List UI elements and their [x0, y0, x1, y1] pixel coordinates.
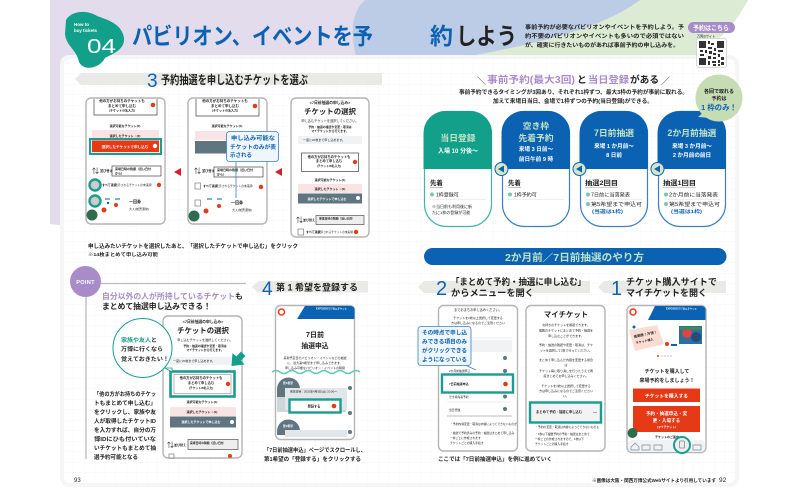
- callout: clickable items: [418, 326, 476, 370]
- phone screen G: チケット毎に取り消しを行ったうえで再: [539, 368, 593, 373]
- phone screen B: ⇅: [194, 167, 201, 175]
- card: same-day registration: 先着: [430, 178, 443, 187]
- phone screen C: 他の方がお持ちのチケットも: [308, 154, 350, 159]
- section bar: [424, 248, 726, 265]
- heading: pre-reservation and same-day: 事前予約(最大3回): [487, 73, 575, 86]
- card: same-day registration: たに1枠の登録が可能: [432, 209, 470, 215]
- phone screen G: ・予約の変更・取消は内容によってできないものも: [535, 425, 599, 429]
- step 04 badge: [65, 12, 124, 68]
- header background shapes: [50, 0, 748, 227]
- callout: only eligible tickets: 申し込み可能な: [231, 134, 275, 142]
- card: 2 months lottery: 2か月前抽選: [668, 127, 717, 138]
- phone screen B: 大人(前売通常): [232, 207, 252, 212]
- card: 2 months lottery: (当選は1枠): [671, 208, 702, 215]
- phone screen A: 並び替え: [100, 168, 113, 173]
- phone screen D: 選択したチケットで申し込む: [181, 419, 221, 424]
- heading description: 加えて来場日当日、会場で1枠ずつの予約(当日登録)ができる。: [493, 97, 653, 105]
- card: 7 days lottery: 8 日前: [606, 151, 622, 159]
- phone screen C: 来場日時の降順（近い日付: [319, 216, 353, 220]
- heading: step 2: [418, 276, 590, 300]
- phone screen E: 抽選申込: [301, 341, 329, 350]
- card: 7 days lottery: 抽選2回目: [585, 178, 618, 187]
- card: same-day registration: [423, 111, 492, 226]
- phone screen B: 選択可能なチケット(0): [212, 123, 242, 128]
- phone screen G: い。: [563, 394, 569, 398]
- card: first-come: 前日午前 9 時: [519, 155, 553, 163]
- phone screen D: 一度に20枚まで申し込めます。: [173, 358, 215, 363]
- speech circle: 覚えておきたい！: [121, 355, 169, 363]
- phone screen B: 来場日時の降順（近い日付: [217, 167, 253, 172]
- speech circle: 家族や: [121, 336, 139, 344]
- phone screen H: 来場予約をしましょう！: [639, 377, 695, 384]
- phone screen H: EXPO2025デジタルチケット: [666, 306, 698, 310]
- arrow: [275, 168, 282, 176]
- heading: pre-reservation and same-day: と: [577, 74, 587, 86]
- phone screen G: ・1枚以下複数予約の予約・抽選はまとめて: [535, 432, 590, 436]
- heading: step 1: [598, 276, 726, 300]
- card: 2 months lottery: 来場 3 か月前～: [672, 142, 712, 150]
- phone screen B: から）: [217, 172, 226, 176]
- point section: も: [235, 292, 243, 301]
- card: first-come: 先着予約: [518, 132, 554, 143]
- phone screen D: 並び替え: [174, 442, 186, 447]
- phone screen F: ・予約内容変更・取消は内容によってできないものが: [450, 422, 517, 426]
- phone screen D: (チケットID名入力): [189, 386, 213, 390]
- caption: step 3: 申し込みたいチケットを選択したあと、「選択したチケットで申し込む」をクリック: [88, 242, 298, 250]
- phone screen E: 来場日時：2025年4月5日(土) 20:00～: [290, 390, 337, 394]
- phone screen A: 来場日時の降順（近い日付: [115, 166, 151, 171]
- phone screen D: ⇅: [167, 441, 174, 449]
- phone screen D: 予約・抽選の確認や変更・取消は: [183, 343, 227, 348]
- phone screen C: すべて選択: [306, 229, 321, 234]
- phone screen D: 他の方がお持ちのチケットも: [180, 375, 222, 380]
- heading: step 4: 第 1 希望を登録する: [276, 282, 358, 292]
- phone screen A: から）: [115, 170, 124, 176]
- phone screen G: 度まとめてお申し込みください。: [544, 373, 588, 378]
- phone screen F: 2か月前抽選申込: [449, 369, 470, 373]
- phone screen E: [272, 306, 360, 440]
- phone screen D: 選択可能なチケット(0): [187, 399, 217, 404]
- phone screen D: 申し込むチケットを選択してください。: [177, 337, 233, 342]
- point section: POINT: [76, 280, 95, 286]
- heading: step 3: 3: [147, 71, 158, 92]
- phone screen E: 第1希望: [283, 381, 293, 385]
- step 04 badge: How to: [74, 22, 89, 27]
- card: 7 days lottery: 来場 1 か月前～: [594, 142, 634, 150]
- card: first-come: 先着: [508, 178, 521, 187]
- phone screen B: 並び替え: [202, 168, 215, 173]
- phone screen E: に、最大第5希望まで申し込みできます。: [287, 360, 343, 365]
- phone screen C: まとめて申し込む: [316, 158, 343, 163]
- phone screen B: [188, 98, 267, 224]
- callout: clickable items: ようになっている: [422, 356, 467, 364]
- phone screen A: 他の方がお持ちのチケットも: [99, 98, 145, 103]
- phone screen D: まとめて申し込む: [188, 380, 215, 385]
- footer note and page number: 92: [719, 477, 727, 484]
- page number 93: 93: [74, 478, 81, 484]
- card: 7 days lottery: 7日前抽選: [594, 127, 634, 138]
- phone screen D: チケットの選択: [177, 326, 229, 335]
- phone screen F: 当日登録: [449, 408, 460, 412]
- card: 2 months lottery: [657, 111, 726, 226]
- phone screen G: まとめて予約・抽選に申し込む: [536, 409, 583, 414]
- intro text: 事前予約が必要なパビリオンやイベントを予約しよう。予: [525, 23, 684, 31]
- phone screen H: チケットを購入して: [645, 368, 689, 375]
- callout: only eligible tickets: チケットのみが表: [230, 143, 276, 151]
- phone screen E: EXPO2025デジタルチケット: [316, 306, 348, 310]
- point body text: を入力すれば、自分の万: [94, 426, 156, 434]
- phone screen C: 並び替え: [303, 217, 315, 222]
- phone screen G: は: [564, 362, 568, 367]
- phone screen G: 申し込むことができます。: [548, 333, 584, 338]
- phone screen B: すべて選択: [203, 183, 218, 188]
- callout: clickable items: がクリックできる: [422, 346, 467, 354]
- heading: pre-reservation and same-day: 当日登録: [588, 73, 629, 86]
- phone screen A: 選択可能なチケット(0): [110, 123, 140, 128]
- heading: step 2: 「まとめて予約・抽選に申し込む」: [451, 276, 586, 287]
- card: first-come: 来場 3 日前～: [519, 145, 553, 153]
- phone screen G: 方は申し込みになるのでご注意ください: [539, 388, 593, 393]
- callout: only eligible tickets: 示される: [230, 152, 252, 159]
- phone screen F: チケットを2枚以上選択して変更する: [453, 315, 503, 320]
- card: 2 months lottery: 第5希望まで申込可: [669, 201, 720, 208]
- heading: pre-reservation and same-day: [477, 73, 670, 86]
- phone screen E: 来場予定日のパビリオン・イベントなどの抽選: [283, 355, 347, 360]
- phone screen E: 申し込み可能なパビリオン・イベントの時間: [285, 365, 345, 370]
- bubble: one slot each: 予約は: [711, 95, 727, 102]
- heading: pre-reservation and same-day: ／: [661, 76, 670, 86]
- heading: step 3: [75, 71, 382, 92]
- phone screen D: マイチケットから行えます。: [186, 347, 224, 352]
- speech circle: 万博に行くなら: [121, 345, 163, 353]
- point section: まとめて抽選申し込みできる！: [102, 301, 211, 311]
- step 04 badge: 04: [87, 36, 116, 58]
- heading: step 2: 2: [436, 278, 447, 300]
- phone screen C: [291, 98, 369, 237]
- phone screen E: 登録する: [308, 404, 320, 408]
- phone screen H: チケットを購入する: [645, 392, 688, 400]
- heading: step 1: 1: [611, 278, 622, 300]
- phone screen A: まとめて申し込む: [108, 103, 136, 108]
- intro text: が、確実に行きたいものがあれば事前予約の申し込みを。: [525, 41, 679, 49]
- card: 7 days lottery: 第5希望まで申込可: [591, 201, 642, 208]
- heading: step 3: 予約抽選を申し込むチケットを選ぶ: [161, 72, 308, 87]
- point body text: [94, 390, 156, 461]
- card: 2 months lottery: 2 か月前の前日: [673, 151, 711, 159]
- phone screen C: チケットの選択: [304, 107, 356, 116]
- caption: step 4: [264, 446, 366, 463]
- phone screen C: 申し込むチケットを選択してください。: [301, 118, 359, 123]
- phone screen C: ⇅: [296, 216, 303, 224]
- point body text: 人が取得したチケットID: [94, 417, 156, 425]
- phone screen G: [526, 306, 605, 451]
- phone screen F: までおまちお申し込みください。: [454, 307, 502, 312]
- phone screen D: <7日前抽選の申し込み>: [183, 319, 224, 324]
- speech circle: [113, 318, 172, 378]
- point body text: 博IDにひも付いていな: [94, 435, 156, 443]
- phone screen A: 選択したチケット：(0): [110, 133, 140, 138]
- heading: step 4: 4: [262, 279, 273, 300]
- card: 7 days lottery: [579, 111, 648, 226]
- phone screen C: マイチケットから行えます。: [311, 128, 349, 133]
- phone screen E: 7日前: [306, 330, 324, 339]
- QR link badge: [688, 22, 735, 68]
- intro text: 約不要のパビリオンやイベントも多いので必須ではない: [525, 32, 684, 40]
- phone screen F: [438, 306, 518, 451]
- phone screen H: 予約・抽選申込・変: [646, 410, 688, 417]
- phone screen B: まとめて申し込む: [211, 103, 239, 108]
- caption: step 4: 第1希望の「登録する」をクリックする: [264, 455, 361, 463]
- point section: [70, 266, 246, 459]
- phone screen B: 表示されるチケットの未来順: [216, 184, 253, 188]
- phone screen G: 複数のチケットにまとめて予約・抽選を: [539, 328, 593, 332]
- phone screen H: (マイチケット): [657, 425, 676, 429]
- phone screen A: 表示されるチケットの未来順: [115, 183, 152, 187]
- phone screen C: 予約・抽選の確認や変更・取消は: [308, 124, 352, 129]
- title: 約: [430, 23, 453, 49]
- title: パビリオン、イベントを予: [132, 23, 373, 49]
- phone screen G: マイチケット: [544, 310, 588, 319]
- phone screen F: 空き枠先着予約: [449, 395, 469, 399]
- point body text: 「他の方がお持ちのチケッ: [94, 390, 156, 398]
- phone screen G: ットを選択して2枚で行ってください。: [540, 348, 592, 352]
- phone screen F: チケットごとの購入手続き: [450, 441, 484, 445]
- heading: pre-reservation and same-day: がある: [630, 73, 659, 86]
- caption: step 4: 「7日前抽選申込」ページでスクロールし、: [264, 446, 366, 454]
- phone screen B: 他の方がお持ちのチケットも: [202, 98, 248, 103]
- bubble: one slot each: [696, 74, 742, 122]
- heading: pre-reservation and same-day: ＼: [477, 76, 486, 86]
- phone screen C: 選択したチケット：(0): [315, 186, 345, 191]
- QR link badge: 万博のサイト: [697, 34, 715, 38]
- heading description: 事前予約できるタイミングが3回あり、それぞれ1枠ずつ、最大3枠の予約が事前に取れる。: [459, 88, 688, 96]
- phone screen F: 7日前抽選申込: [449, 381, 469, 386]
- step 04 badge: buy tickets: [74, 28, 97, 33]
- caption: step 3: [88, 242, 298, 258]
- footer note and page number: ※画像は大阪・関西万博公式Webサイトより引用しています: [592, 477, 716, 484]
- bubble: one slot each: 1 枠のみ！: [701, 103, 737, 112]
- card: same-day registration: ※当日前も利用後に新: [432, 203, 472, 209]
- heading: step 4: [252, 279, 368, 300]
- teal arrow: [232, 352, 246, 366]
- card: first-come: 1枠予約可: [514, 192, 537, 198]
- phone screen H: チケット購入: [635, 336, 654, 345]
- phone screen H: 更・入場する: [653, 417, 681, 424]
- card: same-day registration: 当日登録: [440, 132, 476, 143]
- phone screen F: ・抽選で予約済みの予約・抽選はまとめて申し込み: [450, 431, 515, 435]
- card: same-day registration: 1枠登録可: [436, 192, 459, 198]
- phone screen D: 選択したチケット：(0): [187, 409, 217, 414]
- card: 2 months lottery: 2か月前に当落発表: [669, 192, 718, 198]
- heading: step 2: からメニューを開く: [451, 288, 534, 298]
- phone screen A: すべて選択: [102, 182, 117, 187]
- bubble: one slot each: 各回で取れる: [704, 88, 734, 95]
- heading: step 1: チケット購入サイトで: [626, 276, 717, 287]
- page panel: [60, 55, 739, 487]
- caption: step 3: ※14枚まとめて申し込み可能: [88, 251, 158, 258]
- arrow: [174, 168, 181, 176]
- phone screen A: 選択したチケットで申し込む: [102, 144, 149, 149]
- phone screen H: 感謝祭！万博！: [633, 329, 657, 339]
- phone screen C: 表示されるチケットの未来順: [318, 230, 353, 234]
- card: same-day registration: 入場 10 分後～: [438, 147, 478, 155]
- caption: step 2: ここでは「7日前抽選申込」を例に進めていく: [438, 455, 552, 463]
- phone screen A: 一回券: [129, 198, 141, 204]
- card: first-come: 空き枠: [523, 120, 549, 131]
- phone screen E: 第2希望: [283, 424, 293, 428]
- point body text: トもまとめて申し込む」: [94, 399, 156, 407]
- phone screen C: 選択可能なチケット(0): [315, 177, 345, 182]
- phone screen C: (チケットID名入力): [317, 164, 341, 168]
- phone screen F: 一枠ごとに作成されます: [450, 436, 481, 440]
- phone screen B: (チケットID名入力): [212, 108, 238, 112]
- phone screen G: チケットを2枚以上選択して変更する: [541, 383, 591, 388]
- phone screen A: (チケットID名入力): [109, 108, 135, 112]
- card connector arrows: [495, 162, 664, 176]
- phone screen B: 一回券: [231, 199, 243, 205]
- phone screen G: 一枠ごとの作成されますので、1枚以下: [535, 437, 584, 441]
- speech circle: 友人: [139, 336, 151, 344]
- phone screen G: お持ちのチケットを確認できます。: [542, 322, 590, 327]
- card: 7 days lottery: 7日前に当落発表: [591, 192, 630, 198]
- phone screen H: チケットのご案内: [655, 434, 679, 439]
- footer note and page number: [592, 477, 727, 484]
- phone screen C: <7日前抽選の申し込み>: [310, 100, 351, 105]
- phone screen A: 大人(前売通常): [129, 206, 149, 211]
- card: first-come: [501, 111, 570, 226]
- card: 7 days lottery: (当選は1枠): [592, 208, 623, 215]
- phone screen A: ⇅: [92, 167, 99, 175]
- phone screen G: まとめて申し込んだ内容を変更する場合: [539, 357, 593, 362]
- speech circle: と: [151, 337, 157, 344]
- heading description: [459, 88, 688, 105]
- phone screen D: [163, 316, 242, 458]
- heading: step 1: マイチケットを開く: [626, 288, 707, 298]
- callout: only eligible tickets: [226, 132, 278, 198]
- card: 2 months lottery: 抽選1回目: [663, 178, 696, 187]
- point body text: 選予約可能となる: [94, 453, 138, 461]
- phone screen G: 予約・抽選の確認や変更・取消は、チケ: [539, 342, 593, 347]
- callout: clickable items: みできる項目のみ: [422, 338, 467, 346]
- phone screen C: 一度に20枚まで申し込めます。: [303, 137, 345, 142]
- section bar: 2か月前／7日前抽選のやり方: [505, 251, 644, 264]
- point body text: いチケットもまとめて抽: [94, 444, 156, 452]
- title: しよう: [456, 23, 517, 49]
- intro text: [525, 23, 684, 49]
- phone screen C: 選択したチケットで申し込む: [307, 196, 347, 201]
- phone screen A: [86, 98, 165, 224]
- point section: 自分以外の人が所持しているチケット: [102, 291, 235, 301]
- QR link badge: 予約はこちら: [693, 23, 729, 32]
- point body text: をクリックし、家族や友: [94, 408, 156, 416]
- phone screen G: チケットごとの購入手続き: [535, 442, 569, 446]
- phone screen H: [627, 306, 706, 453]
- phone screen D: 来場日時の降順（近い日付: [190, 441, 224, 445]
- phone screen F: 方は申し込みになるのでご注意ください: [451, 320, 505, 325]
- callout: clickable items: その時点で申し込: [422, 328, 467, 336]
